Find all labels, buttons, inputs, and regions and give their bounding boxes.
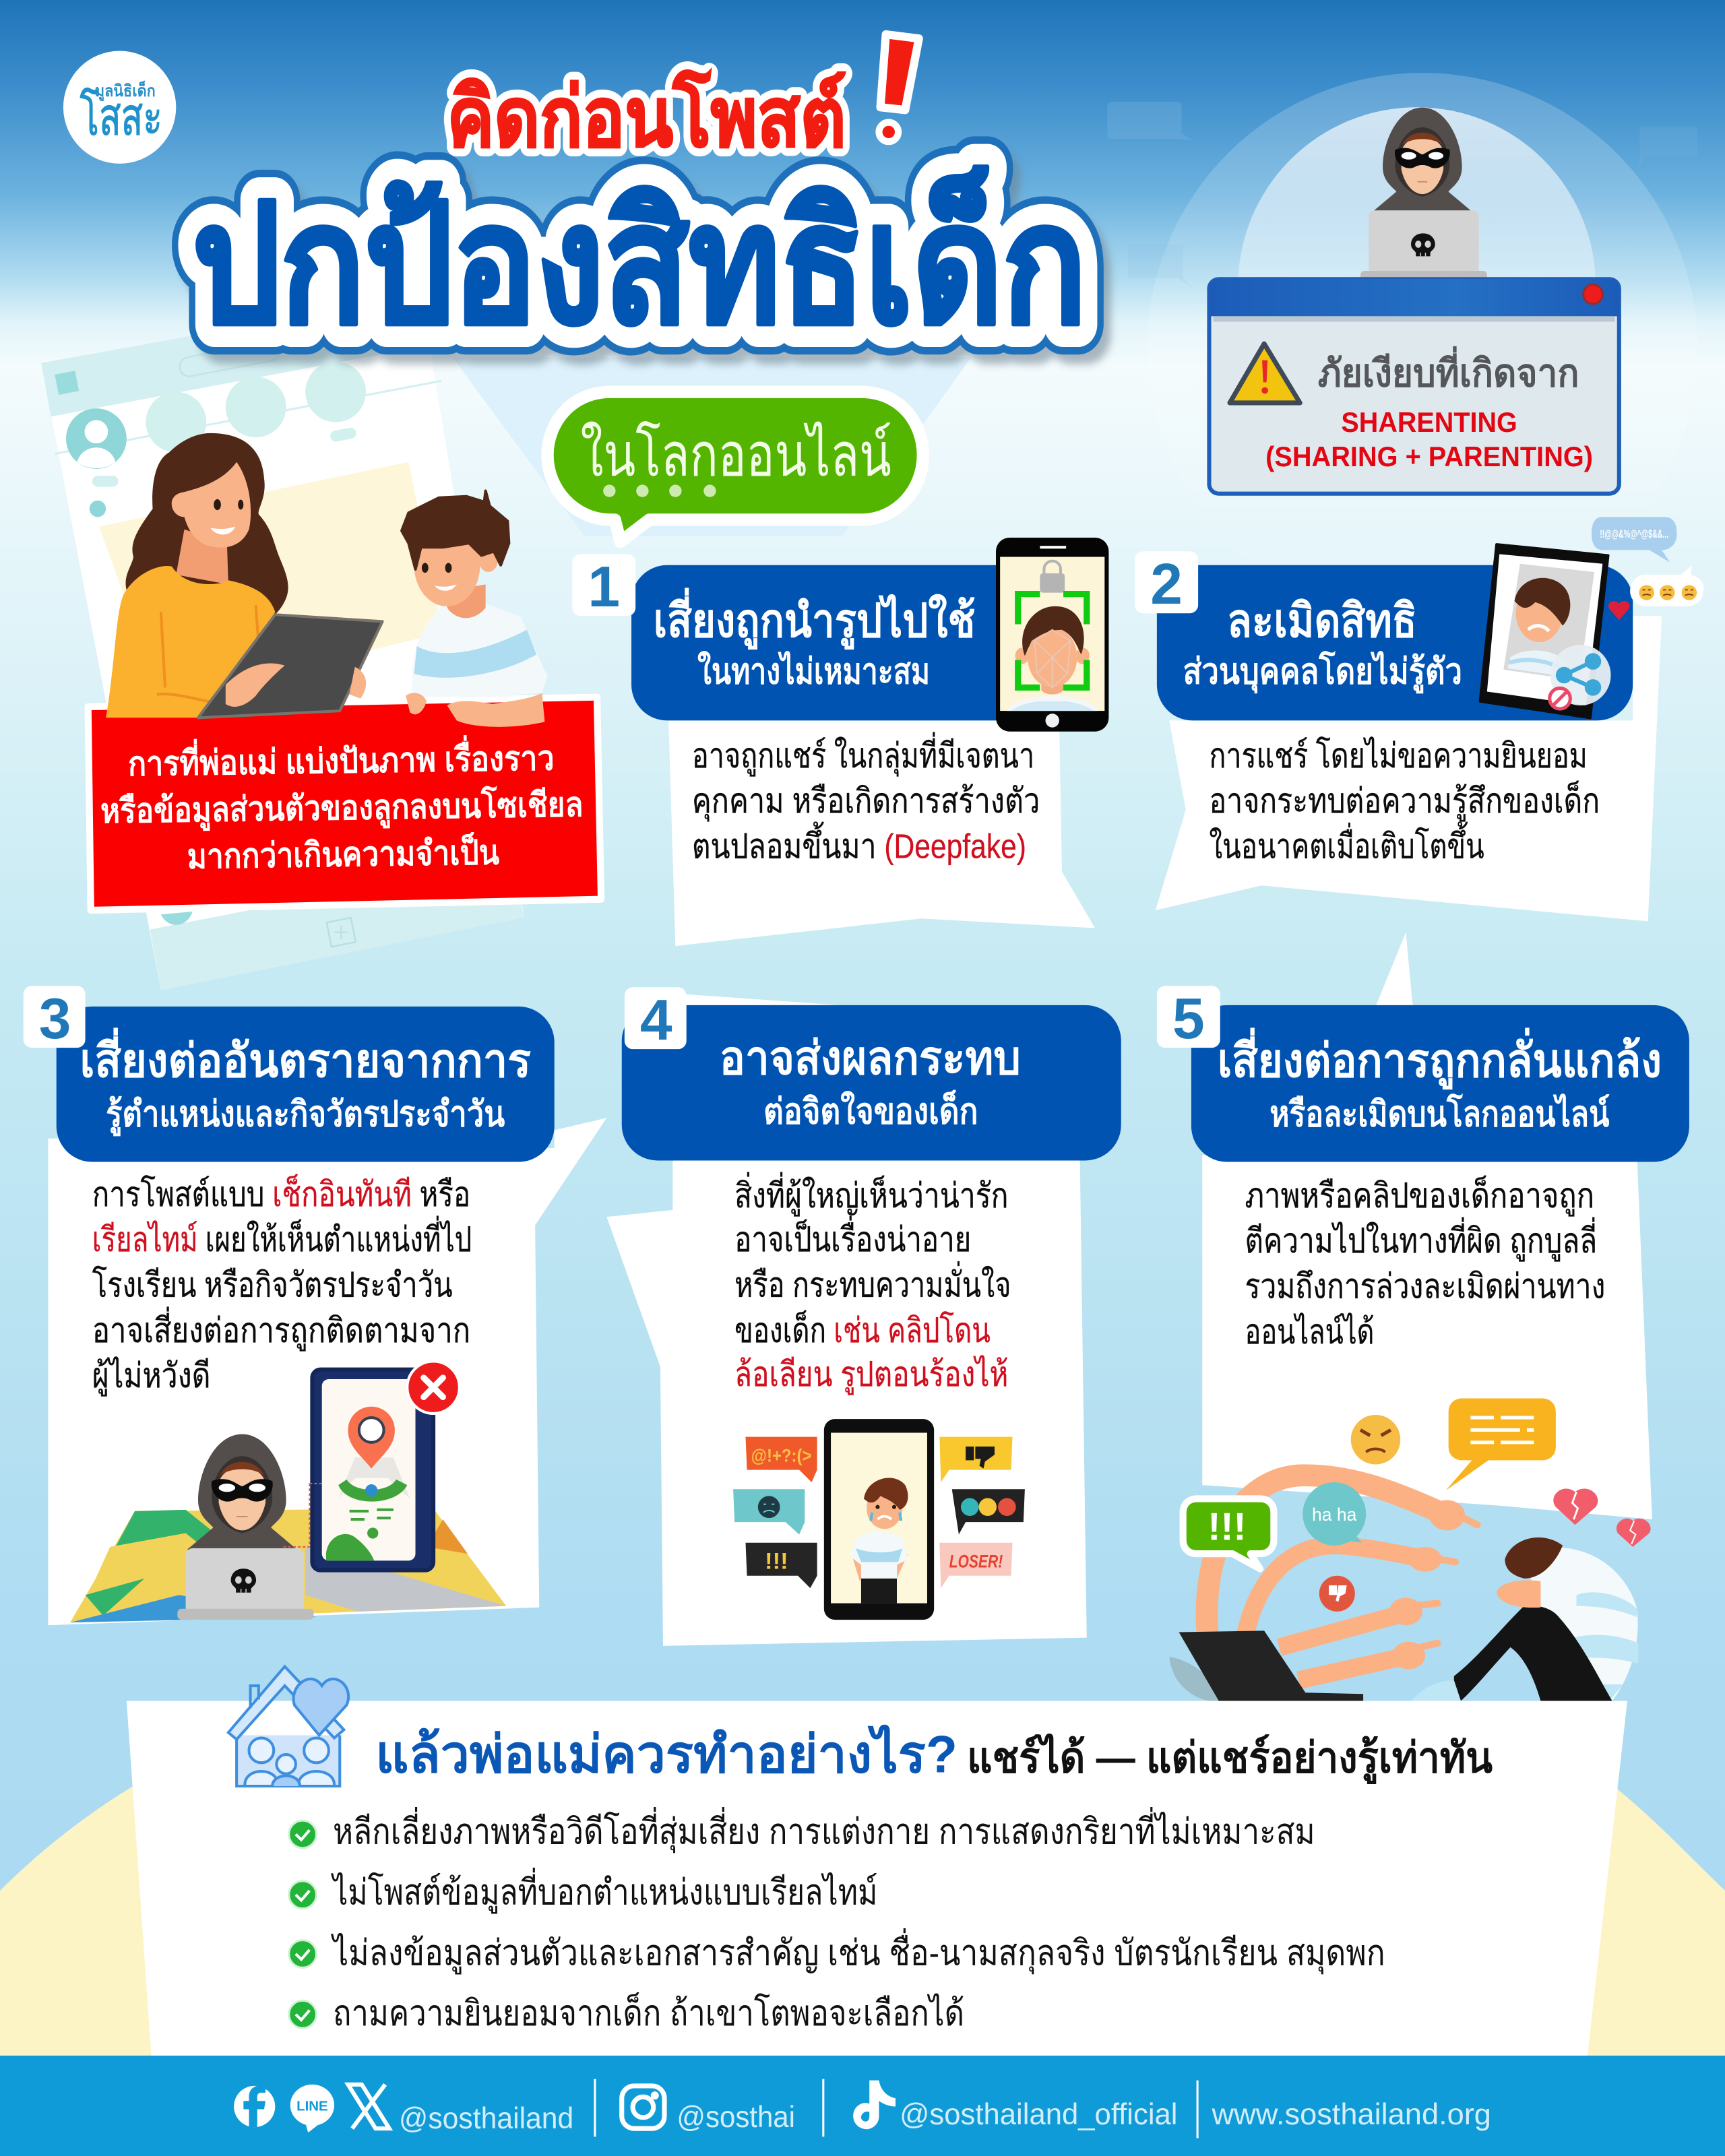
number tile 4 [625, 987, 687, 1052]
light beam behind speech bubble [453, 358, 971, 536]
panel 5: bullying: ตีความไปในทางที่ผิด ถูกบูลลี่ [1245, 1217, 1597, 1262]
number tile 2: 2 [1150, 552, 1183, 616]
panel 3: location risk: รู้ตำแหน่งและกิจวัตรประจำวัน [106, 1094, 505, 1136]
illustration: son looking at tablet [402, 491, 548, 727]
icon: angry face [1351, 1415, 1400, 1464]
panel 5: bullying: ออนไลน์ได้ [1245, 1312, 1374, 1351]
footer: @sosthailand_official [900, 2097, 1177, 2131]
speech bubble: in the online world [548, 392, 923, 542]
icon: broken heart and bubbles: !!@@&%@^@$&&... [1600, 528, 1668, 540]
illustration: hateful comment bubbles: !!! [765, 1549, 788, 1575]
footer [0, 2056, 1725, 2156]
panel 1: image misuse: คุกคาม หรือเกิดการสร้างตัว [692, 782, 1040, 822]
panel 5: bullying: เสี่ยงต่อการถูกกลั่นแกล้ง [1218, 1027, 1662, 1090]
checklist [289, 1807, 1385, 2033]
warning window: sharenting: (SHARING + PARENTING) [1265, 441, 1593, 472]
illustration: crying child in phone [824, 1419, 934, 1620]
panel 3: location risk: การโพสต์แบบ เช็กอินทันที หรือ [92, 1174, 470, 1213]
panel: what parents should do: แชร์ได้ — แต่แชร์อย่างรู้เท่าทัน [967, 1734, 1493, 1785]
main title: protect children's rights: ปกป้องสิทธิเด็ก [201, 177, 1095, 368]
number tile 1 [572, 554, 635, 619]
icon: tilted phone with sad child [1480, 544, 1611, 718]
icon: facebook [234, 2085, 275, 2127]
panel 3: location risk: เสี่ยงต่ออันตรายจากการ [80, 1027, 531, 1087]
icon: ha ha bubble [1303, 1482, 1366, 1546]
panel 2: privacy violation: การแชร์ โดยไม่ขอความยินยอม [1209, 736, 1588, 775]
panel 1: image misuse: อาจถูกแชร์ ในกลุ่มที่มีเจตนา [692, 732, 1034, 777]
illustration: hateful comment bubbles: LOSER! [949, 1552, 1003, 1572]
number tile 5: 5 [1172, 986, 1205, 1051]
yellow hills behind action panel [0, 1783, 1725, 2056]
number tile 5 [1157, 986, 1220, 1051]
icon: warning triangle [1230, 344, 1300, 403]
panel 3: location risk [24, 986, 606, 1625]
illustration: hacker [177, 1434, 313, 1620]
number tile 1: 1 [588, 554, 620, 619]
panel 4: mental impact: ต่อจิตใจของเด็ก [763, 1089, 978, 1131]
panel 2: privacy violation: ในอนาคตเมื่อเติบโตขึ้น [1209, 821, 1484, 865]
panel 2: privacy violation: อาจกระทบต่อความรู้สึกของเด็ก [1209, 781, 1600, 822]
icon: broken heart and bubbles [1592, 517, 1703, 620]
panel: what parents should do [127, 1666, 1627, 2056]
main title: protect children's rights: ปกป้องสิทธิเด็ก [193, 166, 1087, 357]
icon: line: LINE [296, 2099, 328, 2114]
logo: มูลนิธิเด็ก [95, 80, 156, 101]
icon: tiktok [853, 2081, 896, 2129]
item 3: ไม่ลงข้อมูลส่วนตัวและเอกสารสำคัญ เช่น ชื่อ-นามสกุลจริง บัตรนักเรียน สมุดพก [331, 1928, 1385, 1974]
item 2 [289, 1868, 877, 1914]
icon: leaf [1169, 1657, 1222, 1703]
panel 4: mental impact: ของเด็ก เช่น คลิปโดน [734, 1310, 991, 1350]
footer: @sosthai [677, 2099, 795, 2134]
icon: x [348, 2085, 389, 2128]
illustration: map [70, 1509, 506, 1622]
icon: green exclamation bubble [1183, 1498, 1274, 1569]
number tile 3: 3 [39, 986, 71, 1051]
panel 5: bullying: ภาพหรือคลิปของเด็กอาจถูก [1245, 1176, 1594, 1217]
main title: protect children's rights: ปกป้องสิทธิเด็ก [193, 166, 1087, 357]
red callout: what sharenting means: หรือข้อมูลส่วนตัวของลูกลงบนโซเชียล [100, 784, 584, 833]
warning window: sharenting [1209, 279, 1619, 494]
panel 3: location risk: โรงเรียน หรือกิจวัตรประจำวัน [92, 1265, 453, 1304]
speech bubble: in the online world: ในโลกออนไลน์ [580, 421, 891, 489]
item 4: ถามความยินยอมจากเด็ก ถ้าเขาโตพอจะเลือกได้ [333, 1992, 964, 2033]
decorative halo behind hacker [1148, 73, 1697, 623]
panel 5: bullying [1157, 932, 1689, 1703]
illustration: curled-up child [1412, 1537, 1638, 1701]
panel 3: location risk: เรียลไทม์ เผยให้เห็นตำแหน่งที่ไป [92, 1216, 472, 1259]
icon: orange comment bubble [1446, 1399, 1556, 1490]
panel 4: mental impact: อาจส่งผลกระทบ [720, 1032, 1021, 1084]
panel 5: bullying: หรือละเมิดบนโลกออนไลน์ [1269, 1092, 1610, 1134]
illustration: pointing arms from laptop [1207, 1476, 1478, 1680]
panel 5: bullying: รวมถึงการล่วงละเมิดผ่านทาง [1245, 1267, 1605, 1306]
warning window: sharenting: ภัยเงียบที่เกิดจาก [1318, 346, 1579, 395]
logo [63, 51, 176, 164]
panel 3: location risk: ผู้ไม่หวังดี [92, 1356, 210, 1397]
red callout: what sharenting means [88, 697, 601, 910]
illustration: hateful comment bubbles: @!+?:(> [751, 1445, 811, 1465]
illustration: mother holding tablet [106, 433, 383, 718]
icon: laptop [1179, 1630, 1363, 1701]
icon: instagram [622, 2086, 664, 2128]
panel 1: image misuse: ตนปลอมขึ้นมา (Deepfake) [692, 821, 1026, 865]
main title: protect children's rights: ปกป้องสิทธิเด็ก [193, 166, 1087, 357]
icon: ha ha bubble: ha ha [1312, 1504, 1357, 1525]
panel 1: image misuse [572, 538, 1108, 946]
icon: thumbs down [1319, 1576, 1355, 1612]
footer: www.sosthailand.org [1212, 2097, 1491, 2131]
panel 4: mental impact: หรือ กระทบความมั่นใจ [734, 1261, 1011, 1304]
title line: think before posting: คิดก่อนโพสต์ [447, 69, 846, 163]
faint comment bubbles [1107, 102, 1697, 289]
number tile 4: 4 [640, 988, 672, 1052]
panel 3: location risk: อาจเสี่ยงต่อการถูกติดตามจาก [92, 1307, 470, 1352]
logo: โสสะ [80, 88, 162, 146]
panel: what parents should do: แล้วพ่อแม่ควรทำอย่างไร? [375, 1724, 958, 1784]
panel 2: privacy violation: ส่วนบุคคลโดยไม่รู้ตัว [1183, 649, 1462, 693]
hacker at laptop [1360, 108, 1487, 282]
panel 4: mental impact: สิ่งที่ผู้ใหญ่เห็นว่าน่ารัก [734, 1172, 1008, 1217]
red callout: what sharenting means: มากกว่าเกินความจำเป็น [187, 831, 499, 876]
icon: phone with face scan [996, 538, 1108, 732]
panel 1: image misuse: เสี่ยงถูกนำรูปไปใช้ [654, 588, 975, 650]
illustration: phone showing location [282, 1361, 460, 1571]
icon: broken hearts [1553, 1488, 1651, 1547]
panel 1: image misuse: ในทางไม่เหมาะสม [697, 650, 930, 691]
panel 4: mental impact: ล้อเลียน รูปตอนร้องไห้ [734, 1355, 1008, 1395]
number tile 3 [24, 986, 86, 1051]
warning window: sharenting: SHARENTING [1341, 406, 1517, 438]
title line: think before posting: คิดก่อนโพสต์ [447, 69, 846, 163]
item 1: หลีกเลี่ยงภาพหรือวิดีโอที่สุ่มเสี่ยง การแต่งกาย การแสดงกริยาที่ไม่เหมาะสม [333, 1807, 1315, 1853]
icon: green exclamation bubble: !!! [1208, 1506, 1247, 1549]
red callout: what sharenting means: การที่พ่อแม่ แบ่งปันภาพ เรื่องราว [127, 734, 555, 783]
panel 4: mental impact: อาจเป็นเรื่องน่าอาย [734, 1216, 971, 1259]
panel 4: mental impact [606, 987, 1121, 1646]
item 2: ไม่โพสต์ข้อมูลที่บอกตำแหน่งแบบเรียลไทม์ [331, 1868, 877, 1914]
panel 2: privacy violation [1135, 517, 1703, 921]
panel 2: privacy violation: ละเมิดสิทธิ [1227, 594, 1417, 647]
illustration: hateful comment bubbles [733, 1437, 1025, 1588]
icon: line [290, 2085, 334, 2132]
number tile 2 [1135, 551, 1198, 616]
icon: family house with heart [228, 1666, 348, 1786]
footer: @sosthailand [399, 2101, 573, 2135]
illustration: social feed phone panel [41, 294, 524, 990]
